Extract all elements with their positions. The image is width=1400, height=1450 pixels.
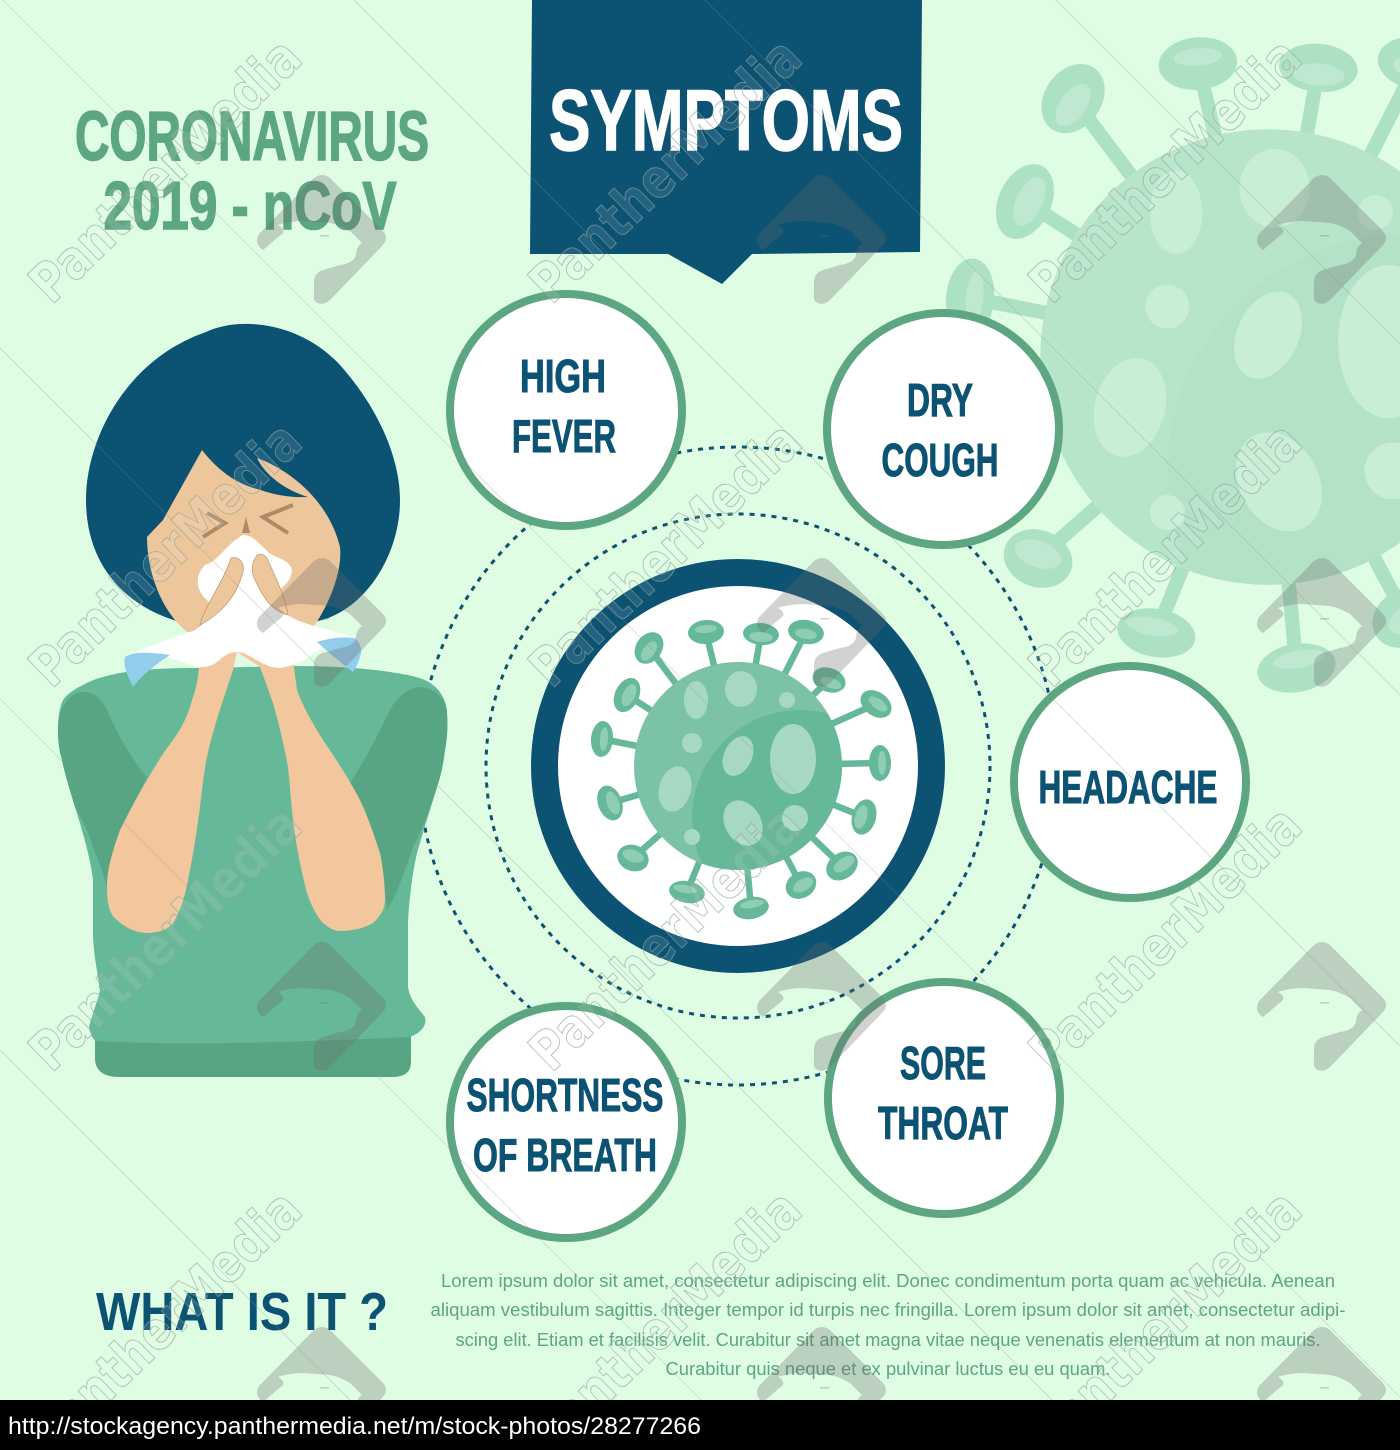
watermark text: PantherMedia <box>1017 409 1314 699</box>
symptom: shortness of breath: SHORTNESS <box>466 1069 664 1121</box>
shirt hem <box>95 1030 411 1077</box>
description text block <box>430 1271 1346 1379</box>
heading banner: symptoms: SYMPTOMS <box>549 73 903 169</box>
watermark text: PantherMedia <box>17 409 314 699</box>
title: CORONAVIRUS <box>75 97 429 175</box>
description text block: Lorem ipsum dolor sit amet, consectetur adipiscing elit. Donec condimentum porta quam ac vehicula. Aenean <box>441 1271 1335 1291</box>
symptom: high fever: HIGH <box>520 350 606 402</box>
central virus badge <box>544 572 932 960</box>
left arm <box>107 652 237 933</box>
symptom: shortness of breath: OF BREATH <box>473 1129 657 1181</box>
symptom: headache: HEADACHE <box>1038 761 1218 813</box>
symptom: sore throat <box>828 982 1060 1214</box>
right arm <box>237 652 385 931</box>
symptom: shortness of breath <box>450 1006 682 1238</box>
tissue drop: right <box>317 638 361 672</box>
tissue drop: left <box>124 653 170 687</box>
watermark text: PantherMedia <box>17 793 314 1083</box>
background virus illustration <box>943 31 1400 707</box>
right sleeve <box>350 687 447 910</box>
symptom: dry cough: COUGH <box>882 434 998 486</box>
symptom: sore throat: THROAT <box>878 1097 1008 1149</box>
watermark text: PantherMedia <box>517 409 814 699</box>
description text block: Curabitur quis neque et ex pulvinar luctus eu eu quam. <box>666 1359 1110 1379</box>
hair <box>86 324 400 622</box>
hair fringe <box>252 458 308 497</box>
symptom: headache <box>1014 666 1246 898</box>
tissue <box>137 535 357 668</box>
symptom: dry cough <box>827 313 1059 545</box>
watermark arrows <box>257 175 1386 1450</box>
heading: what is it: WHAT IS IT ? <box>96 1282 388 1342</box>
source URL footer bar <box>0 1400 1400 1450</box>
dotted ring: inner <box>486 514 990 1018</box>
source URL footer bar: http://stockagency.panthermedia.net/m/stock-photos/28277266 <box>8 1413 701 1440</box>
description text block: aliquam vestibulum sagittis. Integer tempor id turpis nec fringilla. Lorem ipsum dolor sit amet, consectetur adipi- <box>430 1300 1346 1320</box>
symptom: sore throat: SORE <box>900 1037 986 1089</box>
watermark text: PantherMedia <box>517 793 814 1083</box>
watermark text: PantherMedia <box>1017 793 1314 1083</box>
description text block: scing elit. Etiam et facilisis velit. Curabitur sit amet magna vitae neque venenatis elementum at non mauris. <box>456 1330 1320 1350</box>
heading banner: symptoms <box>530 0 922 284</box>
title: 2019 - nCoV <box>104 168 396 244</box>
shirt <box>58 666 447 1043</box>
symptom: dry cough: DRY <box>907 374 973 426</box>
illustration: sneezing woman <box>58 324 447 1077</box>
left sleeve <box>58 692 147 887</box>
symptom: high fever: FEVER <box>512 410 616 462</box>
symptom: high fever <box>450 294 682 526</box>
eyes and nose <box>203 505 293 537</box>
face <box>147 450 340 632</box>
title <box>75 97 429 244</box>
dotted ring: outer <box>419 447 1057 1085</box>
hands <box>200 554 288 625</box>
